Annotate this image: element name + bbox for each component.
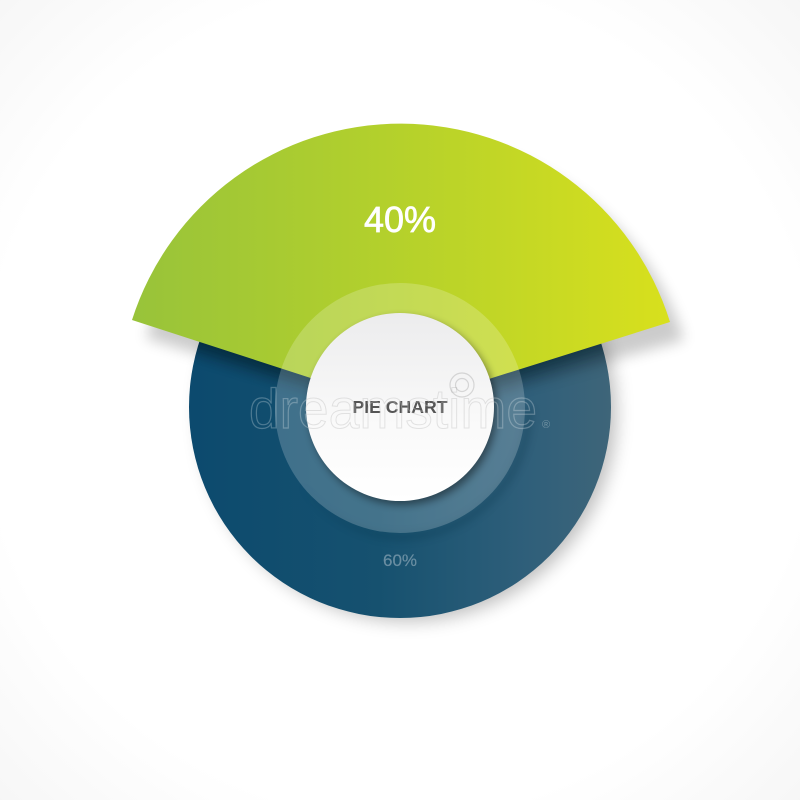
green slice: 40% [132,124,670,407]
blue slice shadow [200,205,616,621]
white centre circle [306,313,494,501]
label: 60%: 60% [383,551,417,570]
green slice shadow on white [146,142,684,418]
translucent ring [275,283,525,533]
green slice shadow on blue [196,342,604,387]
label: pie chart: PIE CHART [352,397,448,417]
label: 40%: 40% [364,199,436,240]
white centre shadow [309,317,497,505]
watermark: dreamstime [249,377,537,440]
watermark: dreamstime [249,377,537,440]
watermark: ® [542,419,550,431]
ring shadow on blue [410,412,532,537]
blue slice: 60% [189,196,611,618]
